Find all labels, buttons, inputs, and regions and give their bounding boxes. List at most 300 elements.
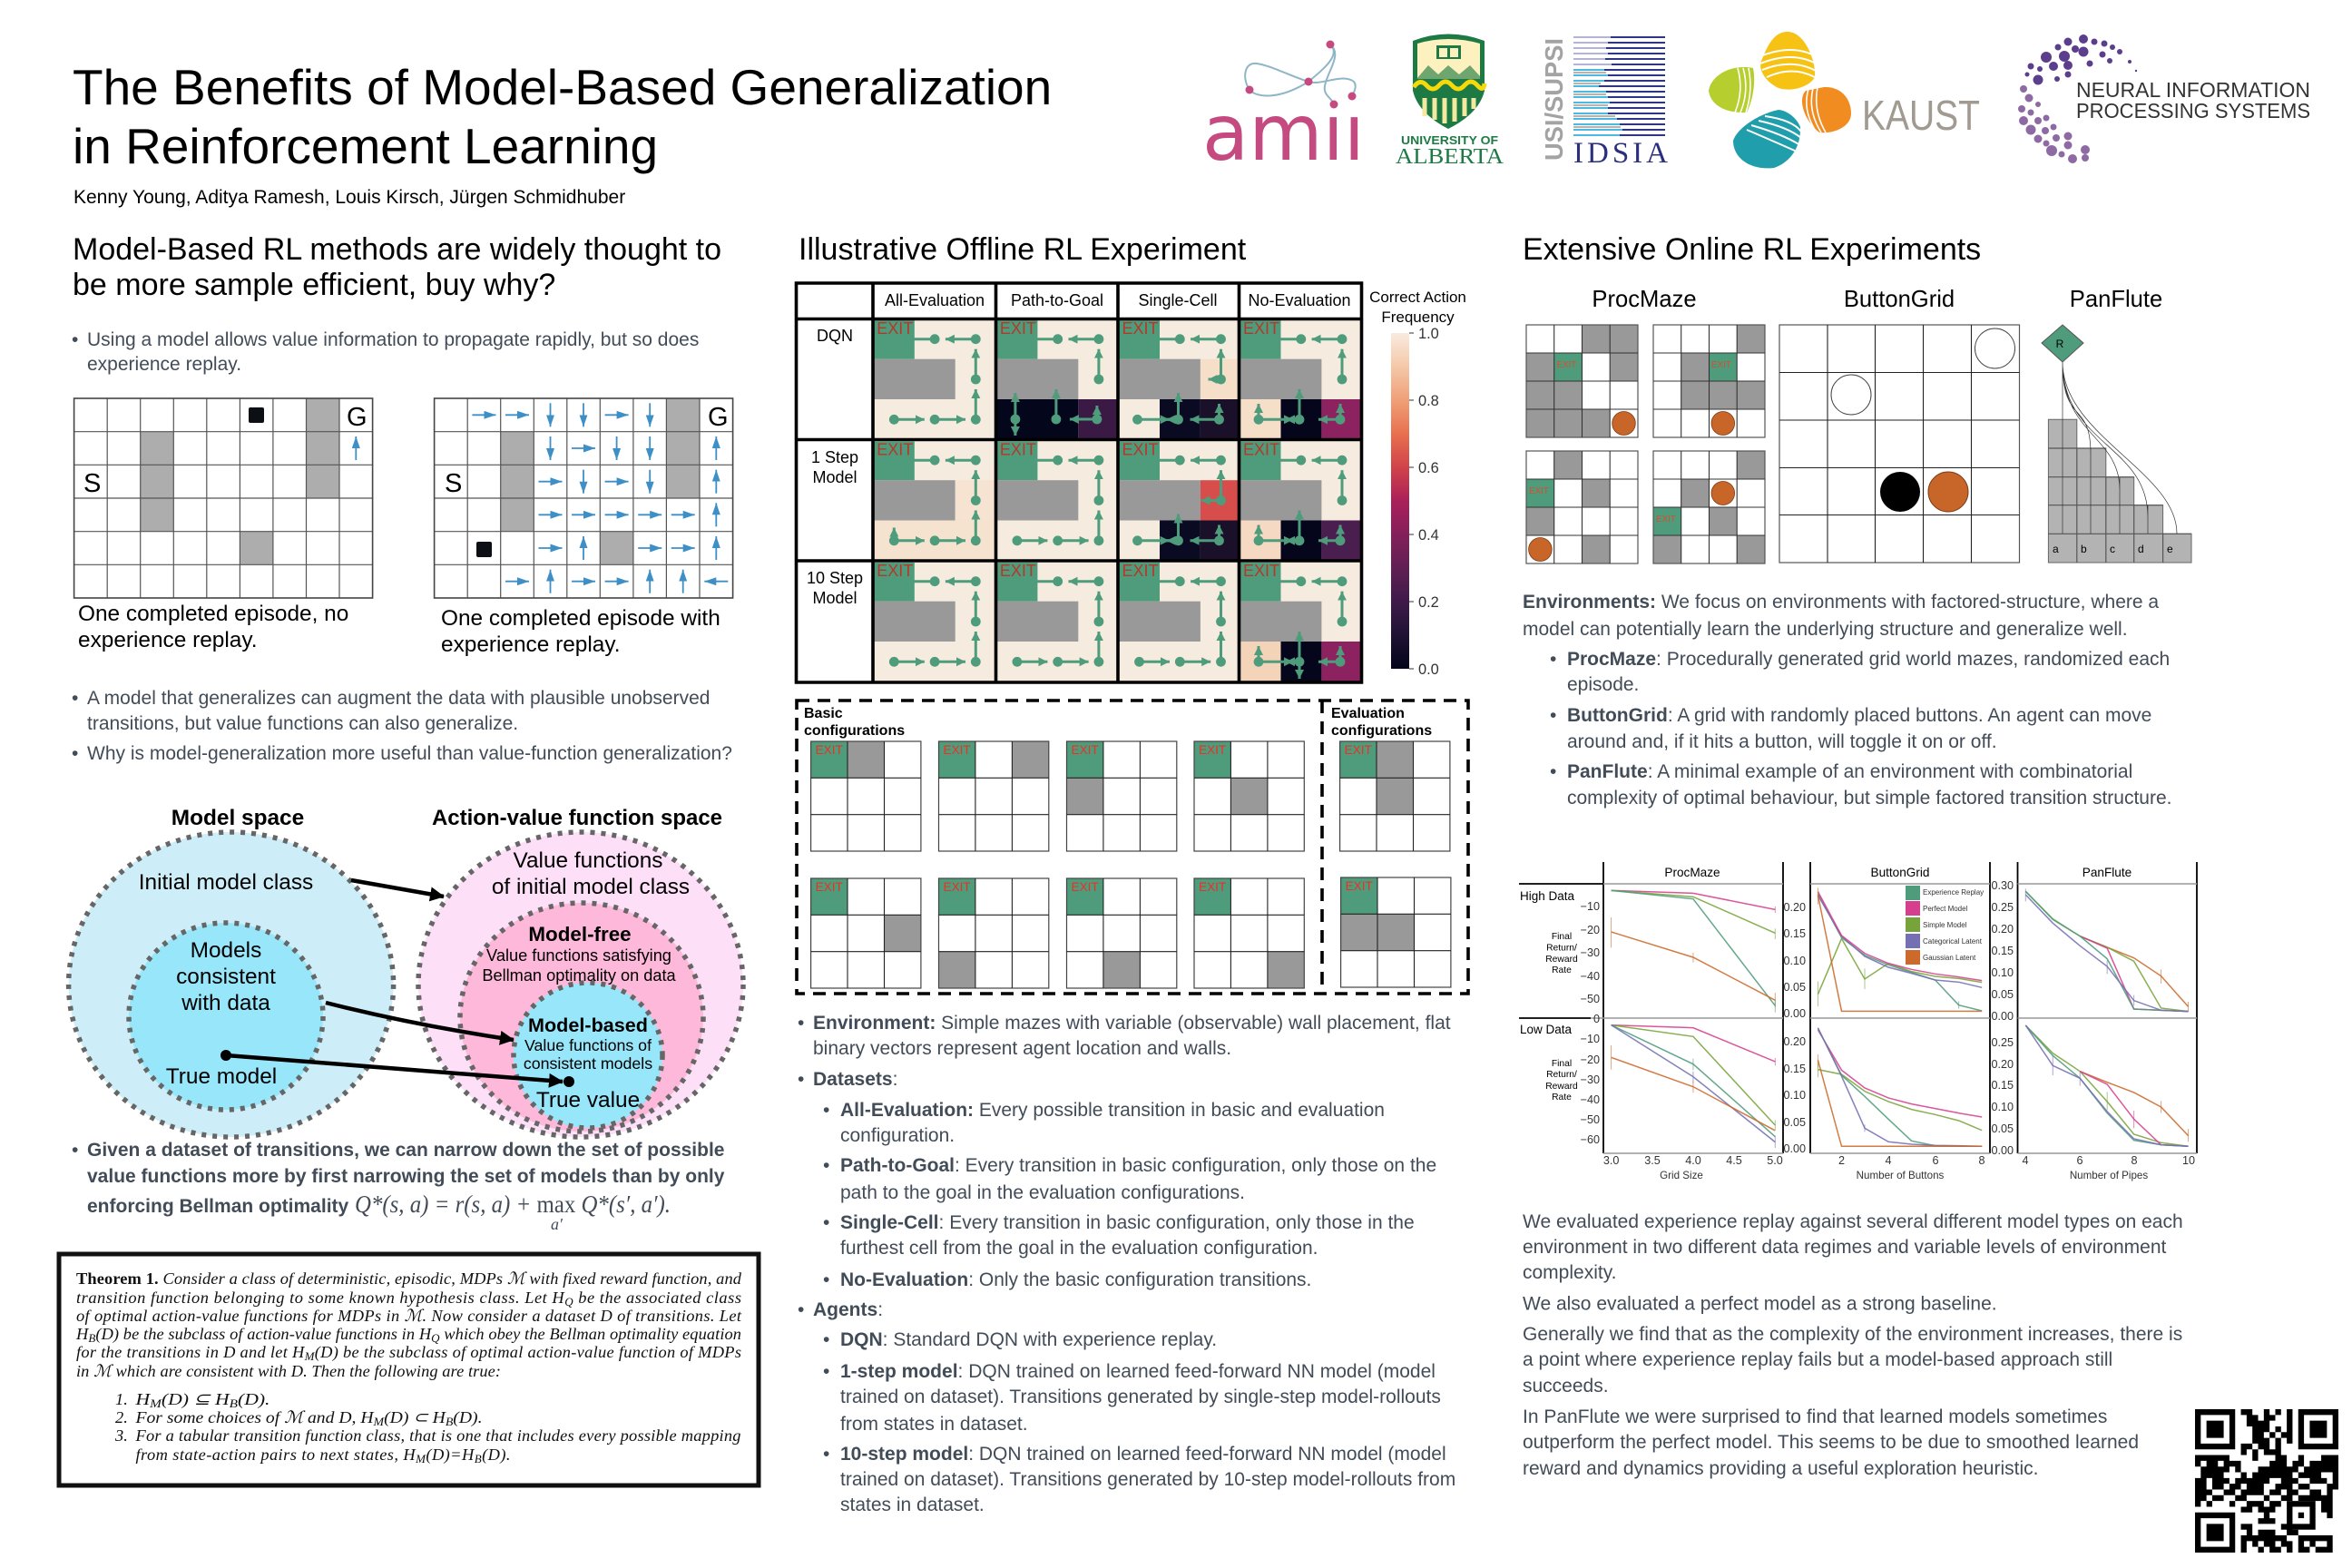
text: experiment description: •: [798, 1013, 804, 1034]
theorem list: 2.: [115, 1408, 128, 1426]
theorem list: (D).: [238, 1390, 270, 1409]
theorem statement: (D) be the subclass of optimal action-value function of MDPs: [315, 1343, 741, 1362]
column headers: All-Evaluation: [885, 291, 985, 309]
theorem statement: M: [304, 1349, 316, 1363]
colorbar: 0.0: [1418, 662, 1439, 678]
text: model generalization bullets: A model that generalizes can augment the data with plausible unobserved: [87, 688, 710, 709]
colorbar: 0.2: [1418, 594, 1439, 611]
chart titles: ProcMaze: [1664, 866, 1720, 879]
text: environments: ButtonGrid: A grid with randomly placed buttons. An agent can move: [1567, 705, 2151, 726]
text: results discussion: In PanFlute we were surprised to find that learned models sometimes: [1523, 1406, 2107, 1427]
x axis labels: 6: [2076, 1154, 2083, 1167]
y axis labels: 0.25: [1991, 901, 2014, 914]
right labels: of initial model class: [492, 875, 690, 899]
label: evaluation configurations: Evaluation: [1331, 706, 1405, 721]
diagram: buttongrid example: [1779, 325, 2020, 563]
diagram: panflute example: R: [2056, 338, 2064, 350]
legend: Simple Model: [1923, 921, 1967, 929]
row labels: Final: [1552, 932, 1572, 942]
text: results discussion: outperform the perfect model. This seems to be due to smoothed learned: [1523, 1432, 2139, 1453]
row labels: Return/: [1546, 1070, 1577, 1080]
diagram: procmaze examples: EXIT: [1557, 360, 1576, 370]
basic configuration grids: EXIT: [816, 743, 843, 757]
logo: usi supsi idsia: IDSIA: [1573, 137, 1668, 170]
basic configuration grids: EXIT: [1071, 743, 1099, 757]
text: experiment description: furthest cell from the goal in the evaluation configuration.: [840, 1238, 1318, 1259]
theorem statement: [75, 1269, 742, 1380]
text: experiment description: [798, 1013, 1455, 1515]
text: experience replay bullet: •: [72, 329, 78, 350]
logo: neural information processing systems: NEURAL INFORMATION: [2076, 78, 2310, 102]
row headers: 1 Step: [811, 448, 858, 466]
text: environments: complexity of optimal behaviour, but simple factored transition structure.: [1567, 788, 2171, 808]
x axis labels: [1603, 1154, 2195, 1181]
theorem list: For some choices of ℳ and D, H: [136, 1408, 358, 1426]
row headers: Model: [812, 589, 858, 607]
heading: model-based rl question: [73, 232, 721, 302]
diagram: grid without experience replay: S: [83, 469, 101, 498]
text: model generalization bullets: transitions, but value functions can also generalize.: [87, 713, 518, 734]
row: dqn: EXIT: [877, 319, 913, 338]
logo: kaust: [1709, 32, 1980, 168]
theorem list: 1.: [115, 1390, 128, 1408]
y axis labels: [1581, 879, 2014, 1157]
caption: no experience replay: [78, 602, 348, 652]
y axis labels: 0.30: [1991, 879, 2014, 892]
row labels: Final: [1552, 1059, 1572, 1069]
logo: usi supsi idsia: [1540, 37, 1668, 170]
x axis labels: 4: [1885, 1154, 1892, 1167]
text: experiment description: All-Evaluation: Every possible transition in basic and evaluation: [840, 1100, 1385, 1121]
text: results discussion: environment in two different data regimes and variable levels of environment: [1523, 1237, 2167, 1258]
theorem list: (D).: [453, 1408, 483, 1427]
theorem list: B: [475, 1452, 482, 1465]
logo: neural information processing systems: PROCESSING SYSTEMS: [2076, 99, 2310, 122]
right labels: Value functions satisfying: [486, 946, 671, 965]
text: experiment description: Environment: Simple mazes with variable (observable) wall placement, flat: [813, 1013, 1451, 1034]
x axis labels: 3.0: [1603, 1154, 1619, 1167]
text: environments: model can potentially learn the underlying structure and generalize well.: [1523, 619, 2128, 640]
theorem statement: Theorem 1. Consider a class of deterministic, episodic, MDPs ℳ with fixed reward function, and: [76, 1269, 742, 1288]
y axis labels: 0.15: [1991, 945, 2014, 957]
theorem list: (D) ⊂ H: [384, 1408, 447, 1427]
text: experiment description: •: [823, 1212, 829, 1233]
row headers: [807, 327, 863, 607]
y axis labels: −20: [1581, 924, 1600, 936]
x axis labels: 8: [1978, 1154, 1985, 1167]
row labels: Return/: [1546, 944, 1577, 953]
x axis labels: 4.0: [1685, 1154, 1701, 1167]
text: experiment description: •: [798, 1069, 804, 1090]
y axis labels: 0: [1593, 1013, 1600, 1025]
text: experiment description: •: [798, 1299, 804, 1320]
y axis labels: −20: [1581, 1054, 1600, 1066]
text: results discussion: a point where experience replay fails but a model-based approach still: [1523, 1349, 2112, 1370]
diagram: procmaze examples: EXIT: [1711, 360, 1731, 370]
text: experiment description: from states in dataset.: [840, 1414, 1028, 1435]
heading: extensive online experiments: Extensive Online RL Experiments: [1523, 232, 1981, 267]
dashed frame: [797, 701, 1468, 994]
colorbar: 0.6: [1418, 460, 1439, 476]
caption: no experience replay: experience replay.: [78, 628, 258, 652]
text: model generalization bullets: •: [72, 688, 78, 709]
text: experiment description: DQN: Standard DQN with experience replay.: [840, 1329, 1217, 1350]
y axis labels: 0.05: [1991, 988, 2014, 1001]
right labels: consistent models: [524, 1054, 652, 1073]
column headers: Single-Cell: [1138, 291, 1218, 309]
caption: no experience replay: One completed episode, no: [78, 602, 348, 626]
line charts: [1519, 862, 2197, 1181]
row: dqn: EXIT: [1243, 319, 1279, 338]
y axis labels: 0.20: [1783, 1035, 1806, 1048]
heatmap table: [797, 283, 1362, 682]
caption: with experience replay: experience replay.: [441, 632, 621, 657]
text: narrowing value functions: Q*(s, a) = r(s, a) + max Q*(s′, a′).: [355, 1191, 671, 1218]
row headers: DQN: [817, 327, 853, 345]
text: experiment description: path to the goal in the evaluation configurations.: [840, 1182, 1245, 1203]
text: experiment description: 1-step model: DQN trained on learned feed-forward NN model (model: [840, 1361, 1436, 1382]
label: evaluation configurations: configurations: [1331, 723, 1432, 739]
diagram: procmaze examples: EXIT: [1529, 486, 1549, 496]
region: consistent models: [129, 923, 323, 1110]
text: experiment description: •: [823, 1155, 829, 1176]
chart titles: [1664, 866, 2132, 879]
y axis labels: 0.05: [1783, 1116, 1806, 1129]
row: dqn: EXIT: [1122, 319, 1159, 338]
title: [73, 59, 1052, 174]
text: experiment description: 10-step model: DQN trained on learned feed-forward NN model (model: [840, 1444, 1446, 1465]
right labels: Value functions of: [524, 1036, 652, 1054]
text: environments: Environments: We focus on environments with factored-structure, where a: [1523, 592, 2159, 612]
x axis labels: Number of Pipes: [2070, 1170, 2148, 1181]
colorbar: 1.0: [1418, 326, 1439, 342]
theorem list: (D).: [482, 1446, 510, 1465]
left labels: [139, 870, 313, 1089]
column headers: Path-to-Goal: [1011, 291, 1103, 309]
row labels: Low Data: [1520, 1023, 1573, 1036]
basic configuration grids: EXIT: [816, 880, 843, 894]
diagram: grid with experience replay: S: [445, 469, 462, 498]
theorem list: (D)=H: [426, 1446, 475, 1465]
caption: with experience replay: One completed episode with: [441, 606, 720, 631]
chart titles: ButtonGrid: [1871, 866, 1929, 879]
theorem list: H: [136, 1390, 148, 1408]
environment titles: ProcMaze: [1592, 287, 1697, 312]
arrow: consistent models to model-based: [326, 1003, 514, 1040]
row: 1 step model: [874, 441, 1362, 561]
theorem box: [59, 1254, 759, 1485]
row: 1 step model: EXIT: [877, 441, 913, 459]
theorem statement: be the associated class: [573, 1289, 741, 1307]
evaluation configuration grids: [1340, 741, 1451, 987]
logo: usi supsi idsia: USI/SUPSI: [1540, 38, 1568, 161]
text: environments: •: [1550, 649, 1556, 670]
text: results discussion: complexity.: [1523, 1262, 1616, 1283]
qr code: [2195, 1412, 2338, 1550]
arrow: true model to true value: [220, 1050, 574, 1087]
diagram: procmaze examples: EXIT: [1656, 514, 1676, 524]
text: environments: •: [1550, 761, 1556, 782]
row: 1 step model: EXIT: [1122, 441, 1159, 459]
right labels: Bellman optimality on data: [482, 966, 677, 985]
row: dqn: EXIT: [1000, 319, 1036, 338]
theorem list: For a tabular transition function class, that is one that includes every possible mapping: [134, 1426, 740, 1445]
legend: Categorical Latent: [1923, 937, 1983, 946]
region: value functions of initial class: [418, 832, 743, 1137]
region: initial model class: [69, 832, 394, 1137]
left labels: Initial model class: [139, 870, 313, 895]
row: 10 step model: EXIT: [1243, 562, 1279, 580]
arrow: initial class to value functions: [351, 880, 444, 897]
logo: kaust: KAUST: [1862, 92, 1980, 139]
y axis labels: 0.20: [1783, 901, 1806, 914]
theorem statement: H: [76, 1325, 88, 1343]
y axis labels: 0.15: [1783, 927, 1806, 940]
theorem list: B: [230, 1396, 238, 1410]
diagram: procmaze examples: [1526, 325, 1765, 564]
evaluation configuration grids: EXIT: [1345, 743, 1372, 757]
y axis labels: −40: [1581, 1093, 1600, 1106]
theorem list: M: [149, 1396, 162, 1410]
theorem list: (D) ⊆ H: [162, 1390, 231, 1409]
row labels: Reward: [1545, 955, 1578, 965]
x axis labels: 8: [2131, 1154, 2138, 1167]
y axis labels: 0.10: [1783, 1089, 1806, 1102]
theorem statement: of optimal action-value functions for MDPs in ℳ. Now consider a dataset D of transitions. Let: [76, 1307, 742, 1325]
row: dqn: [874, 319, 1362, 439]
text: environments: [1523, 592, 2171, 808]
x axis labels: 10: [2182, 1154, 2195, 1167]
label: basic configurations: [804, 706, 905, 739]
left labels: with data: [181, 991, 270, 1015]
maze configurations panel: [797, 701, 1468, 994]
text: results discussion: [1523, 1211, 2183, 1479]
x axis labels: 4: [2022, 1154, 2029, 1167]
diagram: model space and value function space: [69, 806, 743, 1137]
label: evaluation configurations: [1331, 706, 1432, 739]
left labels: consistent: [176, 965, 276, 989]
text: experiment description: Path-to-Goal: Every transition in basic configuration, only those on the: [840, 1155, 1436, 1176]
x axis labels: Number of Buttons: [1857, 1170, 1945, 1181]
y axis labels: 0.15: [1783, 1063, 1806, 1075]
y axis labels: −10: [1581, 900, 1600, 913]
logo: amii: amıı: [1202, 88, 1365, 179]
title: in Reinforcement Learning: [73, 118, 658, 174]
label: basic configurations: Basic: [804, 706, 843, 721]
row headers: 10 Step: [807, 569, 863, 587]
text: environments: episode.: [1567, 674, 1639, 695]
theorem statement: transition function belonging to some known hypothesis class. Let H: [76, 1289, 564, 1307]
y axis labels: 0.00: [1991, 1010, 2014, 1023]
theorem list: 3.: [114, 1426, 128, 1445]
row: 1 step model: EXIT: [1243, 441, 1279, 459]
y axis labels: 0.00: [1783, 1007, 1806, 1020]
y axis labels: −50: [1581, 1113, 1600, 1126]
diagram: panflute example: b: [2081, 543, 2087, 555]
x axis labels: 5.0: [1767, 1154, 1783, 1167]
diagram: panflute example: e: [2167, 543, 2173, 555]
caption: with experience replay: [441, 606, 720, 657]
colorbar: 0.4: [1418, 527, 1439, 544]
theorem list: M: [372, 1415, 385, 1428]
row labels: High Data: [1520, 889, 1575, 903]
environment titles: [1592, 287, 2162, 312]
text: narrowing value functions: a′: [551, 1215, 564, 1233]
y axis labels: 0.20: [1991, 923, 2014, 936]
row labels: Rate: [1552, 1093, 1572, 1102]
colorbar: 0.8: [1418, 393, 1439, 409]
theorem statement: Q: [564, 1295, 573, 1308]
chart separators: [1591, 884, 2197, 1153]
x axis labels: 4.5: [1726, 1154, 1742, 1167]
text: model generalization bullets: Why is model-generalization more useful than value-function generalization?: [87, 743, 732, 764]
text: experiment description: Datasets:: [813, 1069, 897, 1090]
theorem list: M: [415, 1452, 426, 1465]
diagram: grid with experience replay: G: [708, 403, 729, 432]
row labels: Rate: [1552, 965, 1572, 975]
x axis labels: 6: [1932, 1154, 1939, 1167]
text: experiment description: configuration.: [840, 1125, 955, 1146]
text: experiment description: •: [823, 1361, 829, 1382]
y axis labels: 0.10: [1991, 1101, 2014, 1113]
colorbar: Frequency: [1381, 309, 1455, 326]
y axis labels: −30: [1581, 946, 1600, 959]
y axis labels: −10: [1581, 1033, 1600, 1045]
diagram: panflute example: a: [2053, 543, 2059, 555]
heading: model space: Model space: [172, 806, 304, 830]
right labels: True value: [536, 1088, 640, 1112]
y axis labels: 0.00: [1991, 1144, 2014, 1157]
y axis labels: −30: [1581, 1073, 1600, 1086]
text: experiment description: Agents:: [813, 1299, 883, 1320]
heading: model-based rl question: Model-Based RL methods are widely thought to: [73, 232, 721, 267]
y axis labels: 0.15: [1991, 1079, 2014, 1092]
y axis labels: 0.20: [1991, 1058, 2014, 1071]
text: experiment description: No-Evaluation: Only the basic configuration transitions.: [840, 1269, 1311, 1290]
theorem list: from state-action pairs to next states, H: [136, 1446, 416, 1464]
left labels: Models: [191, 938, 261, 963]
region: model-based: [514, 983, 662, 1128]
text: environments: ProcMaze: Procedurally generated grid world mazes, randomized each: [1567, 649, 2170, 670]
legend: Perfect Model: [1923, 905, 1968, 913]
theorem statement: which obey the Bellman optimality equation: [440, 1325, 741, 1343]
text: environments: around and, if it hits a button, will toggle it on or off.: [1567, 731, 1997, 752]
text: model generalization bullets: [72, 688, 732, 764]
basic configuration grids: EXIT: [1071, 880, 1099, 894]
logo: university of alberta: ALBERTA: [1396, 145, 1504, 169]
right labels: Model-free: [528, 923, 632, 946]
x axis labels: 2: [1838, 1154, 1845, 1167]
heading: illustrative offline experiment: Illustrative Offline RL Experiment: [799, 232, 1247, 267]
theorem list: B: [446, 1415, 453, 1428]
logo: university of alberta: [1396, 34, 1504, 169]
right labels: Model-based: [528, 1014, 648, 1036]
logo: university of alberta: UNIVERSITY OF: [1401, 134, 1498, 147]
text: experiment description: •: [823, 1100, 829, 1121]
text: results discussion: reward and dynamics providing a useful exploration heuristic.: [1523, 1458, 2038, 1479]
y axis labels: 0.10: [1991, 966, 2014, 979]
text: experiment description: Single-Cell: Every transition in basic configuration, only those in the: [840, 1212, 1415, 1233]
text: experiment description: binary vectors represent agent location and walls.: [813, 1038, 1231, 1059]
environment titles: PanFlute: [2070, 287, 2162, 312]
column headers: [885, 291, 1351, 309]
row headers: Model: [812, 468, 858, 486]
y axis labels: 0.00: [1783, 1142, 1806, 1155]
authors: Kenny Young, Aditya Ramesh, Louis Kirsch, Jürgen Schmidhuber: [74, 187, 625, 208]
right labels: [482, 848, 690, 1112]
heading: model-based rl question: be more sample efficient, buy why?: [73, 268, 555, 302]
text: narrowing value functions: value functions more by first narrowing the set of models than by only: [87, 1166, 725, 1187]
theorem statement: Q: [431, 1331, 440, 1345]
logo: amii: [1202, 40, 1365, 179]
column headers: No-Evaluation: [1248, 291, 1351, 309]
basic configuration grids: [811, 741, 1304, 988]
diagram: grid without experience replay: G: [347, 403, 368, 432]
text: results discussion: succeeds.: [1523, 1376, 1609, 1396]
row: 10 step model: EXIT: [1122, 562, 1159, 580]
legend: [1906, 886, 1984, 965]
environment titles: ButtonGrid: [1844, 287, 1955, 312]
legend: Gaussian Latent: [1923, 954, 1976, 962]
text: experience replay bullet: experience replay.: [87, 354, 241, 375]
diagram: panflute example: d: [2138, 543, 2144, 555]
diagram: panflute example: [2042, 325, 2191, 563]
left labels: True model: [166, 1064, 277, 1089]
y axis labels: 0.05: [1783, 981, 1806, 994]
y axis labels: −40: [1581, 970, 1600, 983]
text: narrowing value functions: [72, 1140, 725, 1233]
heading: action-value function space: Action-value function space: [432, 806, 722, 830]
basic configuration grids: EXIT: [1199, 880, 1226, 894]
chart frames: [1519, 862, 2197, 1153]
basic configuration grids: EXIT: [944, 880, 971, 894]
row: 10 step model: [874, 562, 1362, 681]
text: experience replay bullet: Using a model allows value information to propagate rapidly, but so does: [87, 329, 699, 350]
text: narrowing value functions: •: [72, 1140, 78, 1161]
text: results discussion: We evaluated experience replay against several different model types on each: [1523, 1211, 2183, 1232]
text: experiment description: •: [823, 1269, 829, 1290]
diagram: grid with experience replay: [435, 398, 733, 598]
label: basic configurations: configurations: [804, 723, 905, 739]
x axis labels: 3.5: [1644, 1154, 1661, 1167]
row labels: Reward: [1545, 1082, 1578, 1092]
diagram: panflute example: c: [2110, 543, 2115, 555]
diagram: grid without experience replay: [74, 398, 373, 598]
colorbar: Correct Action: [1369, 289, 1466, 306]
series lines: [1612, 887, 2189, 1148]
text: experiment description: trained on dataset). Transitions generated by 10-step model-rollouts from: [840, 1469, 1455, 1490]
text: results discussion: Generally we find that as the complexity of the environment increases, there is: [1523, 1324, 2182, 1345]
title: The Benefits of Model-Based Generalization: [73, 59, 1052, 115]
y axis labels: 0.25: [1991, 1036, 2014, 1049]
colorbar: [1369, 289, 1466, 678]
theorem statement: in ℳ which are consistent with D. Then the following are true:: [76, 1362, 501, 1380]
region: model-free: [460, 903, 703, 1132]
chart titles: PanFlute: [2082, 866, 2132, 879]
theorem statement: (D) be the subclass of action-value functions in H: [95, 1325, 433, 1344]
theorem statement: for the transitions in D and let H: [76, 1343, 304, 1361]
text: experiment description: states in dataset.: [840, 1494, 985, 1515]
text: experiment description: •: [823, 1329, 829, 1350]
logo: neural information processing systems: [2018, 34, 2310, 163]
legend: Experience Replay: [1923, 888, 1984, 897]
y axis labels: −50: [1581, 993, 1600, 1005]
basic configuration grids: EXIT: [944, 743, 971, 757]
text: experiment description: •: [823, 1444, 829, 1465]
theorem list: [114, 1390, 740, 1465]
row: 1 step model: EXIT: [1000, 441, 1036, 459]
text: experience replay bullet: [72, 329, 699, 375]
